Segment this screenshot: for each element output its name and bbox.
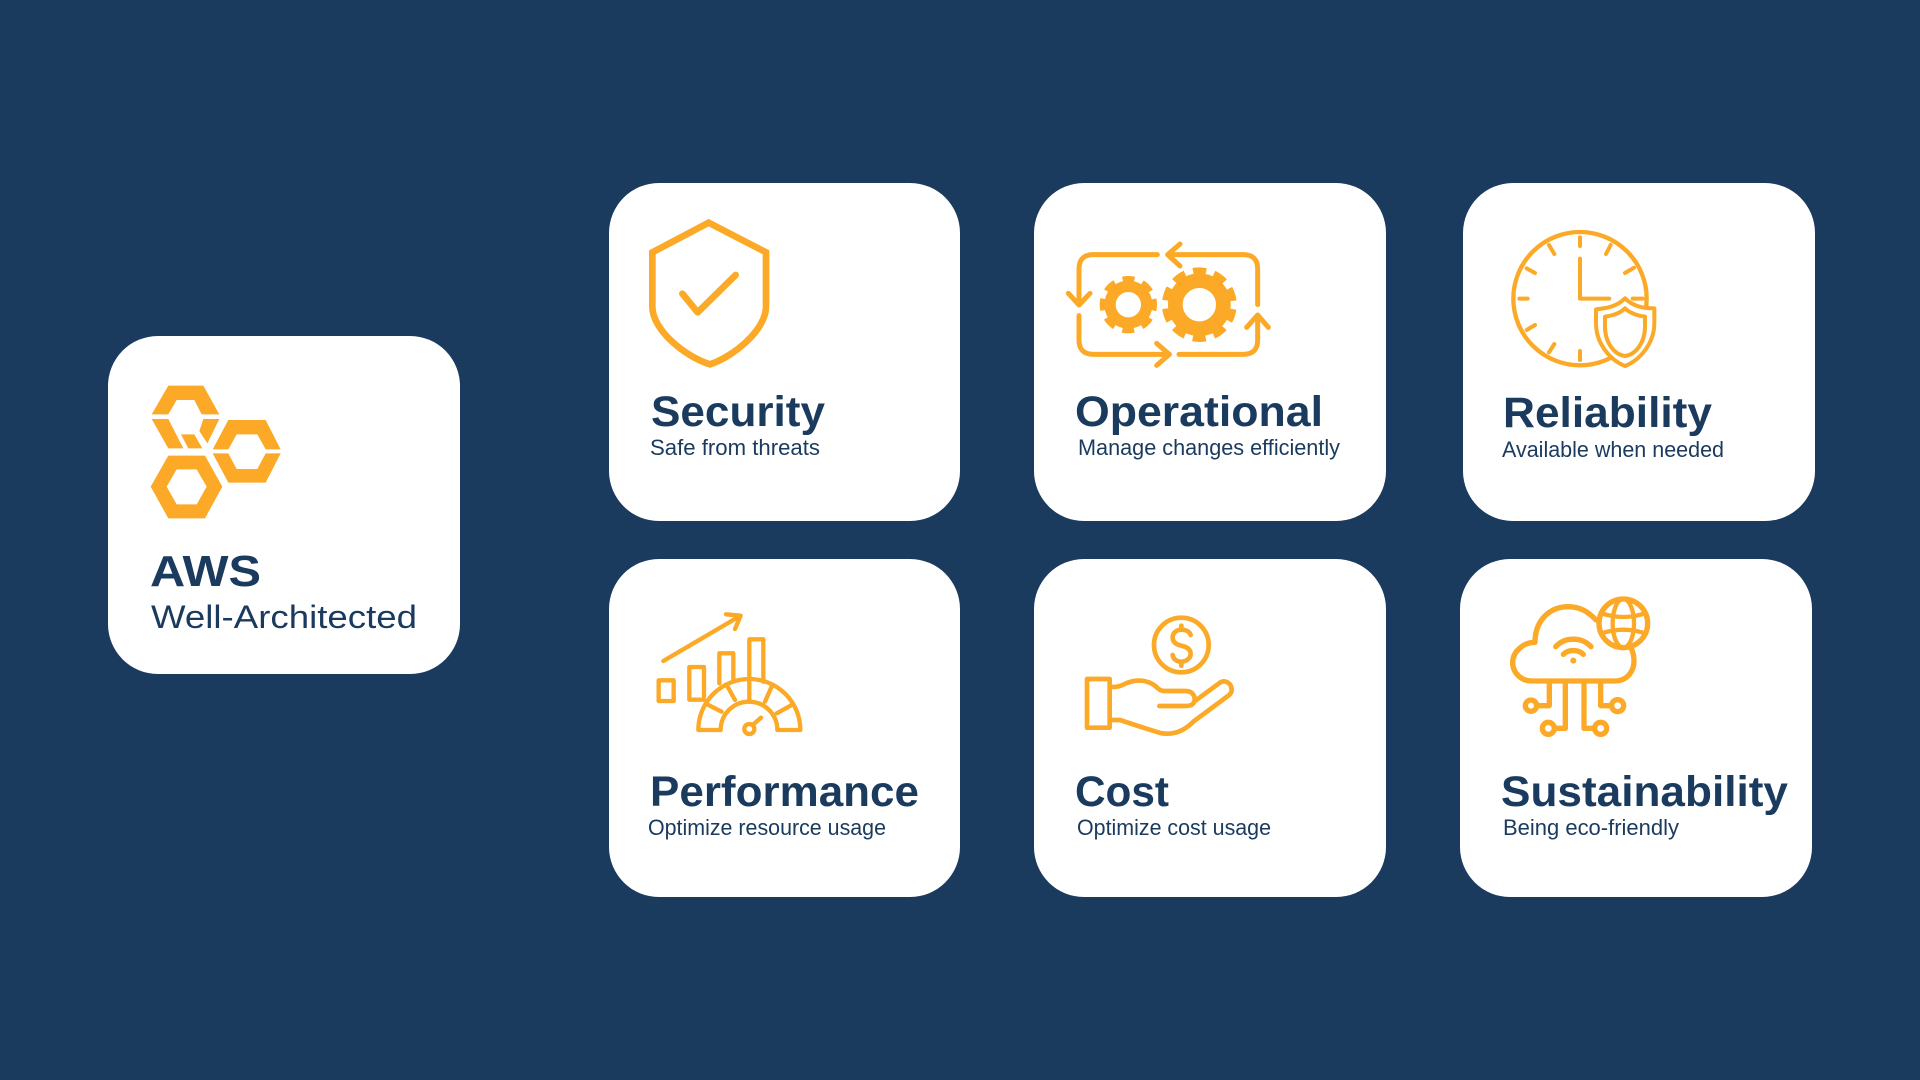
card background: Sustainability [1460,559,1812,897]
description: Reliability: Available when needed [1502,437,1724,462]
icon: gears with cycle arrows [1068,244,1268,365]
panel: Security [609,183,960,521]
heading: Sustainability: Sustainability [1501,768,1788,816]
icon: hand holding coin [1087,618,1232,734]
heading: Security: Security [651,388,825,436]
card background: AWS [108,336,460,674]
heading: Reliability: Reliability [1503,389,1712,437]
card background: Operational [1034,183,1386,521]
panel: Reliability [1463,183,1815,521]
icon: clock with shield [1513,232,1654,366]
description: Performance: Optimize resource usage [648,815,886,840]
icon: bars and speedometer [659,614,800,734]
panel: Sustainability [1460,559,1812,897]
card background: Security [609,183,960,521]
heading: Performance: Performance [650,768,919,816]
description: Operational: Manage changes efficiently [1078,435,1340,460]
icon: cloud, globe and circuit [1513,599,1648,734]
heading: AWS: AWS [150,547,261,596]
icon: shield with checkmark [652,223,766,364]
panel: Operational [1034,183,1386,521]
heading: Cost: Cost [1075,768,1169,816]
subheading: Well-Architected: Well-Architected [151,599,417,635]
card background: Reliability [1463,183,1815,521]
card background: Cost [1034,559,1386,897]
description: Security: Safe from threats [650,435,820,460]
description: Sustainability: Being eco-friendly [1503,815,1679,840]
panel: Cost [1034,559,1386,897]
heading: Operational: Operational [1075,388,1323,436]
icon: hexagon logo [151,386,281,518]
card background: Performance [609,559,960,897]
panel: AWS Well-Architected [108,336,460,674]
panel: Performance [609,559,960,897]
description: Cost: Optimize cost usage [1077,815,1271,840]
